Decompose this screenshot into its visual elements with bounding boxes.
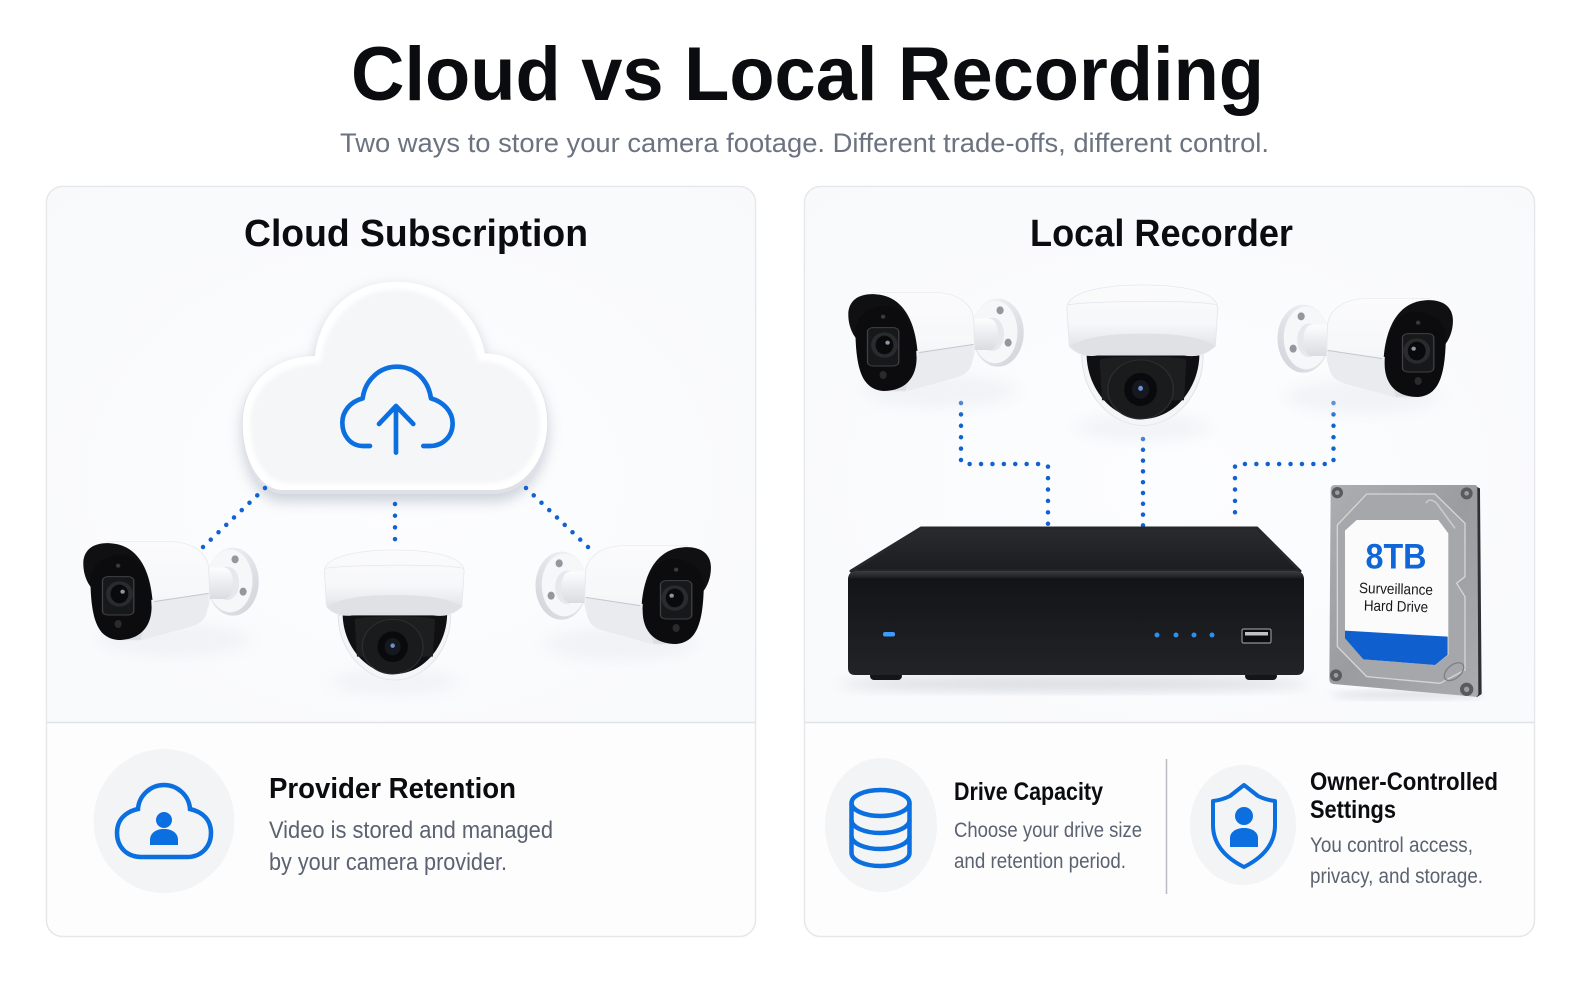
connector: centre camera to recorder	[1141, 439, 1145, 526]
activity lights	[1154, 632, 1214, 638]
camera: left bullet	[83, 542, 259, 657]
title: Cloud vs Local Recording	[351, 32, 1264, 117]
camera: centre dome	[1067, 285, 1218, 442]
connector: centre camera to cloud	[393, 504, 397, 541]
text: owner-controlled settings: privacy, and storage.	[1310, 865, 1483, 888]
panel: local recorder	[804, 186, 1534, 936]
text: drive capacity	[954, 778, 1142, 873]
heading: local recorder: Local Recorder	[1030, 213, 1293, 255]
icon circle: drive capacity	[825, 758, 937, 892]
hard drive	[1329, 485, 1483, 699]
icon circle: provider retention	[94, 749, 234, 893]
connector: right camera to recorder	[1235, 403, 1334, 516]
icon circle: owner-controlled settings	[1190, 765, 1296, 885]
heading: cloud subscription: Cloud Subscription	[244, 213, 588, 255]
text: provider retention: by your camera provider.	[269, 849, 507, 876]
panel: cloud subscription	[46, 186, 756, 936]
hard drive: Hard Drive	[1364, 597, 1428, 616]
usb port	[1242, 629, 1271, 643]
cloud with upload icon	[242, 282, 548, 502]
camera: left bullet	[848, 293, 1024, 408]
camera: right bullet	[536, 546, 711, 661]
text: owner-controlled settings: You control access,	[1310, 834, 1473, 857]
hard drive: 8TB	[1365, 538, 1426, 577]
text: provider retention	[269, 773, 553, 876]
text: drive capacity: Drive Capacity	[954, 778, 1103, 806]
camera: centre dome	[324, 550, 464, 695]
camera: right bullet	[1278, 299, 1453, 414]
connector: right camera to cloud	[526, 488, 589, 548]
drive label	[1345, 520, 1448, 665]
text: owner-controlled settings	[1310, 768, 1498, 888]
text: drive capacity: Choose your drive size	[954, 819, 1142, 842]
text: owner-controlled settings: Owner-Controlled	[1310, 768, 1498, 796]
text: drive capacity: and retention period.	[954, 850, 1126, 873]
hard drive: Surveillance	[1359, 580, 1433, 599]
subtitle: Two ways to store your camera footage. Different trade-offs, different control.	[340, 128, 1269, 158]
network video recorder	[840, 528, 1310, 691]
text: provider retention: Provider Retention	[269, 773, 516, 805]
text: owner-controlled settings: Settings	[1310, 796, 1396, 824]
status light	[883, 632, 895, 636]
connector: left camera to cloud	[202, 488, 265, 548]
connector: left camera to recorder	[961, 403, 1048, 526]
text: provider retention: Video is stored and managed	[269, 817, 553, 844]
icon: cloud upload	[342, 367, 453, 453]
